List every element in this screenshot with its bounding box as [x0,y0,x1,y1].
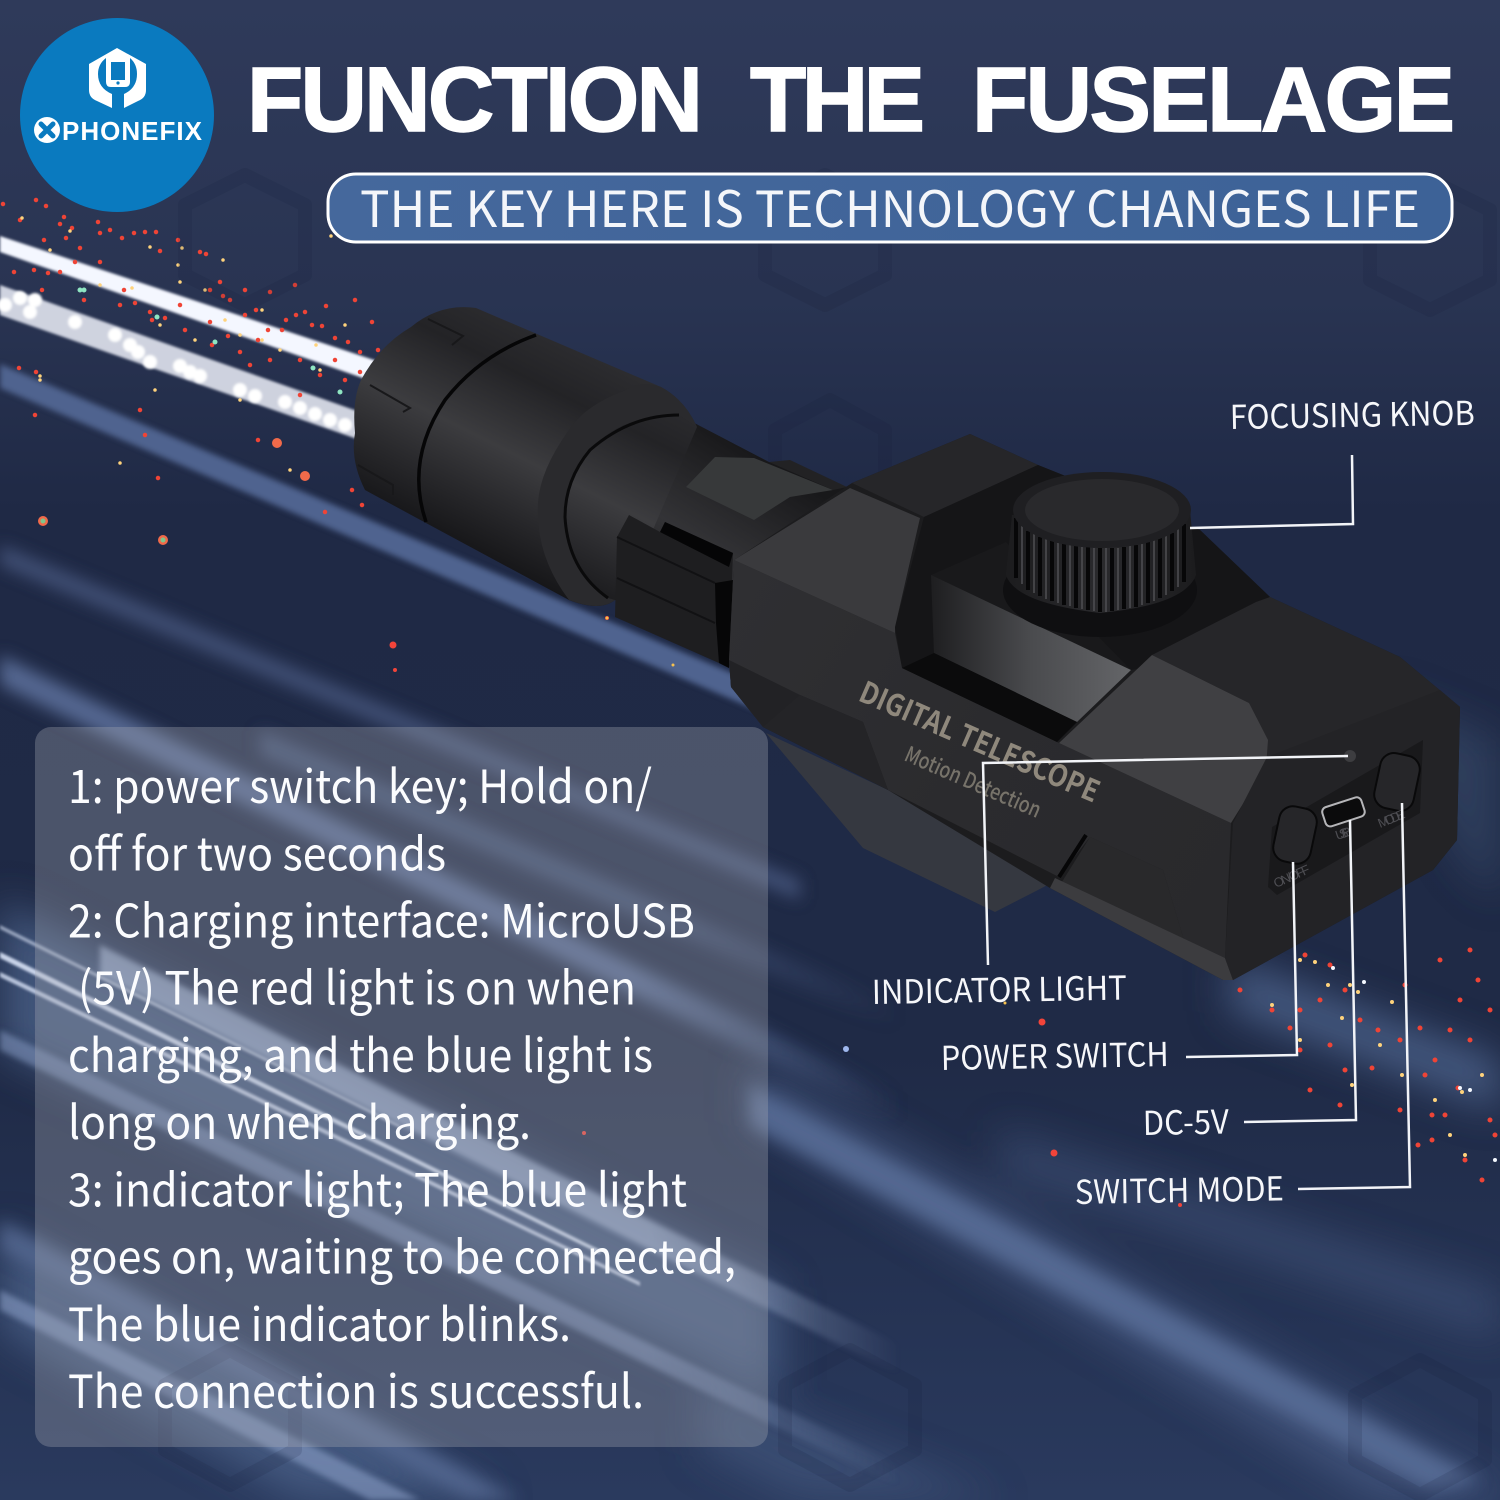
instructions text: 3: indicator light; The blue light [68,1154,687,1220]
button on off [1271,804,1319,866]
subtitle pill: THE KEY HERE IS TECHNOLOGY CHANGES LIFE [360,170,1420,242]
objective tube [354,307,697,606]
usb port [1321,796,1366,828]
recessed light wall [931,542,1131,722]
lower facets [729,660,800,727]
indicator dot [1344,750,1356,762]
rear control face [1225,690,1460,980]
instructions text: 2: Charging interface: MicroUSB [68,886,695,952]
instructions text: The blue indicator blinks. [68,1289,571,1355]
recess [895,465,1270,742]
logo badge [20,18,214,212]
instructions text: off for two seconds [68,818,446,884]
button mode [1372,750,1422,814]
title: THE [750,49,925,151]
title: FUSELAGE [972,49,1455,151]
icon: wrench with phone [89,48,146,108]
title: FUNCTION [247,49,703,151]
callout labels: SWITCH MODE [1074,1162,1284,1214]
grey top plate [1059,655,1268,823]
instructions text: (5V) The red light is on when [78,953,636,1019]
icon: x badge [34,117,60,143]
instructions text: charging, and the blue light is [68,1020,653,1086]
instructions text [68,751,736,1422]
instructions text: long on when charging. [68,1087,531,1153]
particles [3,200,1495,1205]
callout labels: DC-5V [1142,1096,1229,1145]
logo wordmark: PHONEFIX [62,116,203,146]
title [247,49,1455,151]
port captions: MODE [1376,806,1407,831]
digital telescope product [354,307,1460,980]
housing silhouette [729,434,1460,980]
rear top surface [1152,597,1460,757]
callout lines [983,455,1410,1189]
port captions: ON/OFF [1271,862,1312,891]
instructions text: The connection is successful. [68,1356,644,1422]
barrel ring [538,384,697,606]
port captions [1271,806,1407,891]
rail block [615,515,733,668]
front top plate [734,488,920,633]
housing front side [729,560,1231,958]
callout labels: POWER SWITCH [940,1028,1169,1080]
panel: instructions [35,727,768,1447]
instructions text: goes on, waiting to be connected, [68,1222,736,1288]
printed model text: DIGITAL TELESCOPE [853,668,1108,811]
printed model text: Motion Detection [900,737,1047,825]
narrow barrel [565,415,880,610]
focusing knob [1003,472,1197,637]
callout labels: FOCUSING KNOB [1229,387,1475,439]
top rear plate [852,434,1038,517]
callout labels [871,387,1475,1214]
watermarks [165,175,1490,1495]
callout labels: INDICATOR LIGHT [871,962,1127,1014]
translucent reflection below housing [766,733,1057,912]
port captions: USB [1333,824,1353,843]
instructions text: 1: power switch key; Hold on/ [68,751,652,817]
